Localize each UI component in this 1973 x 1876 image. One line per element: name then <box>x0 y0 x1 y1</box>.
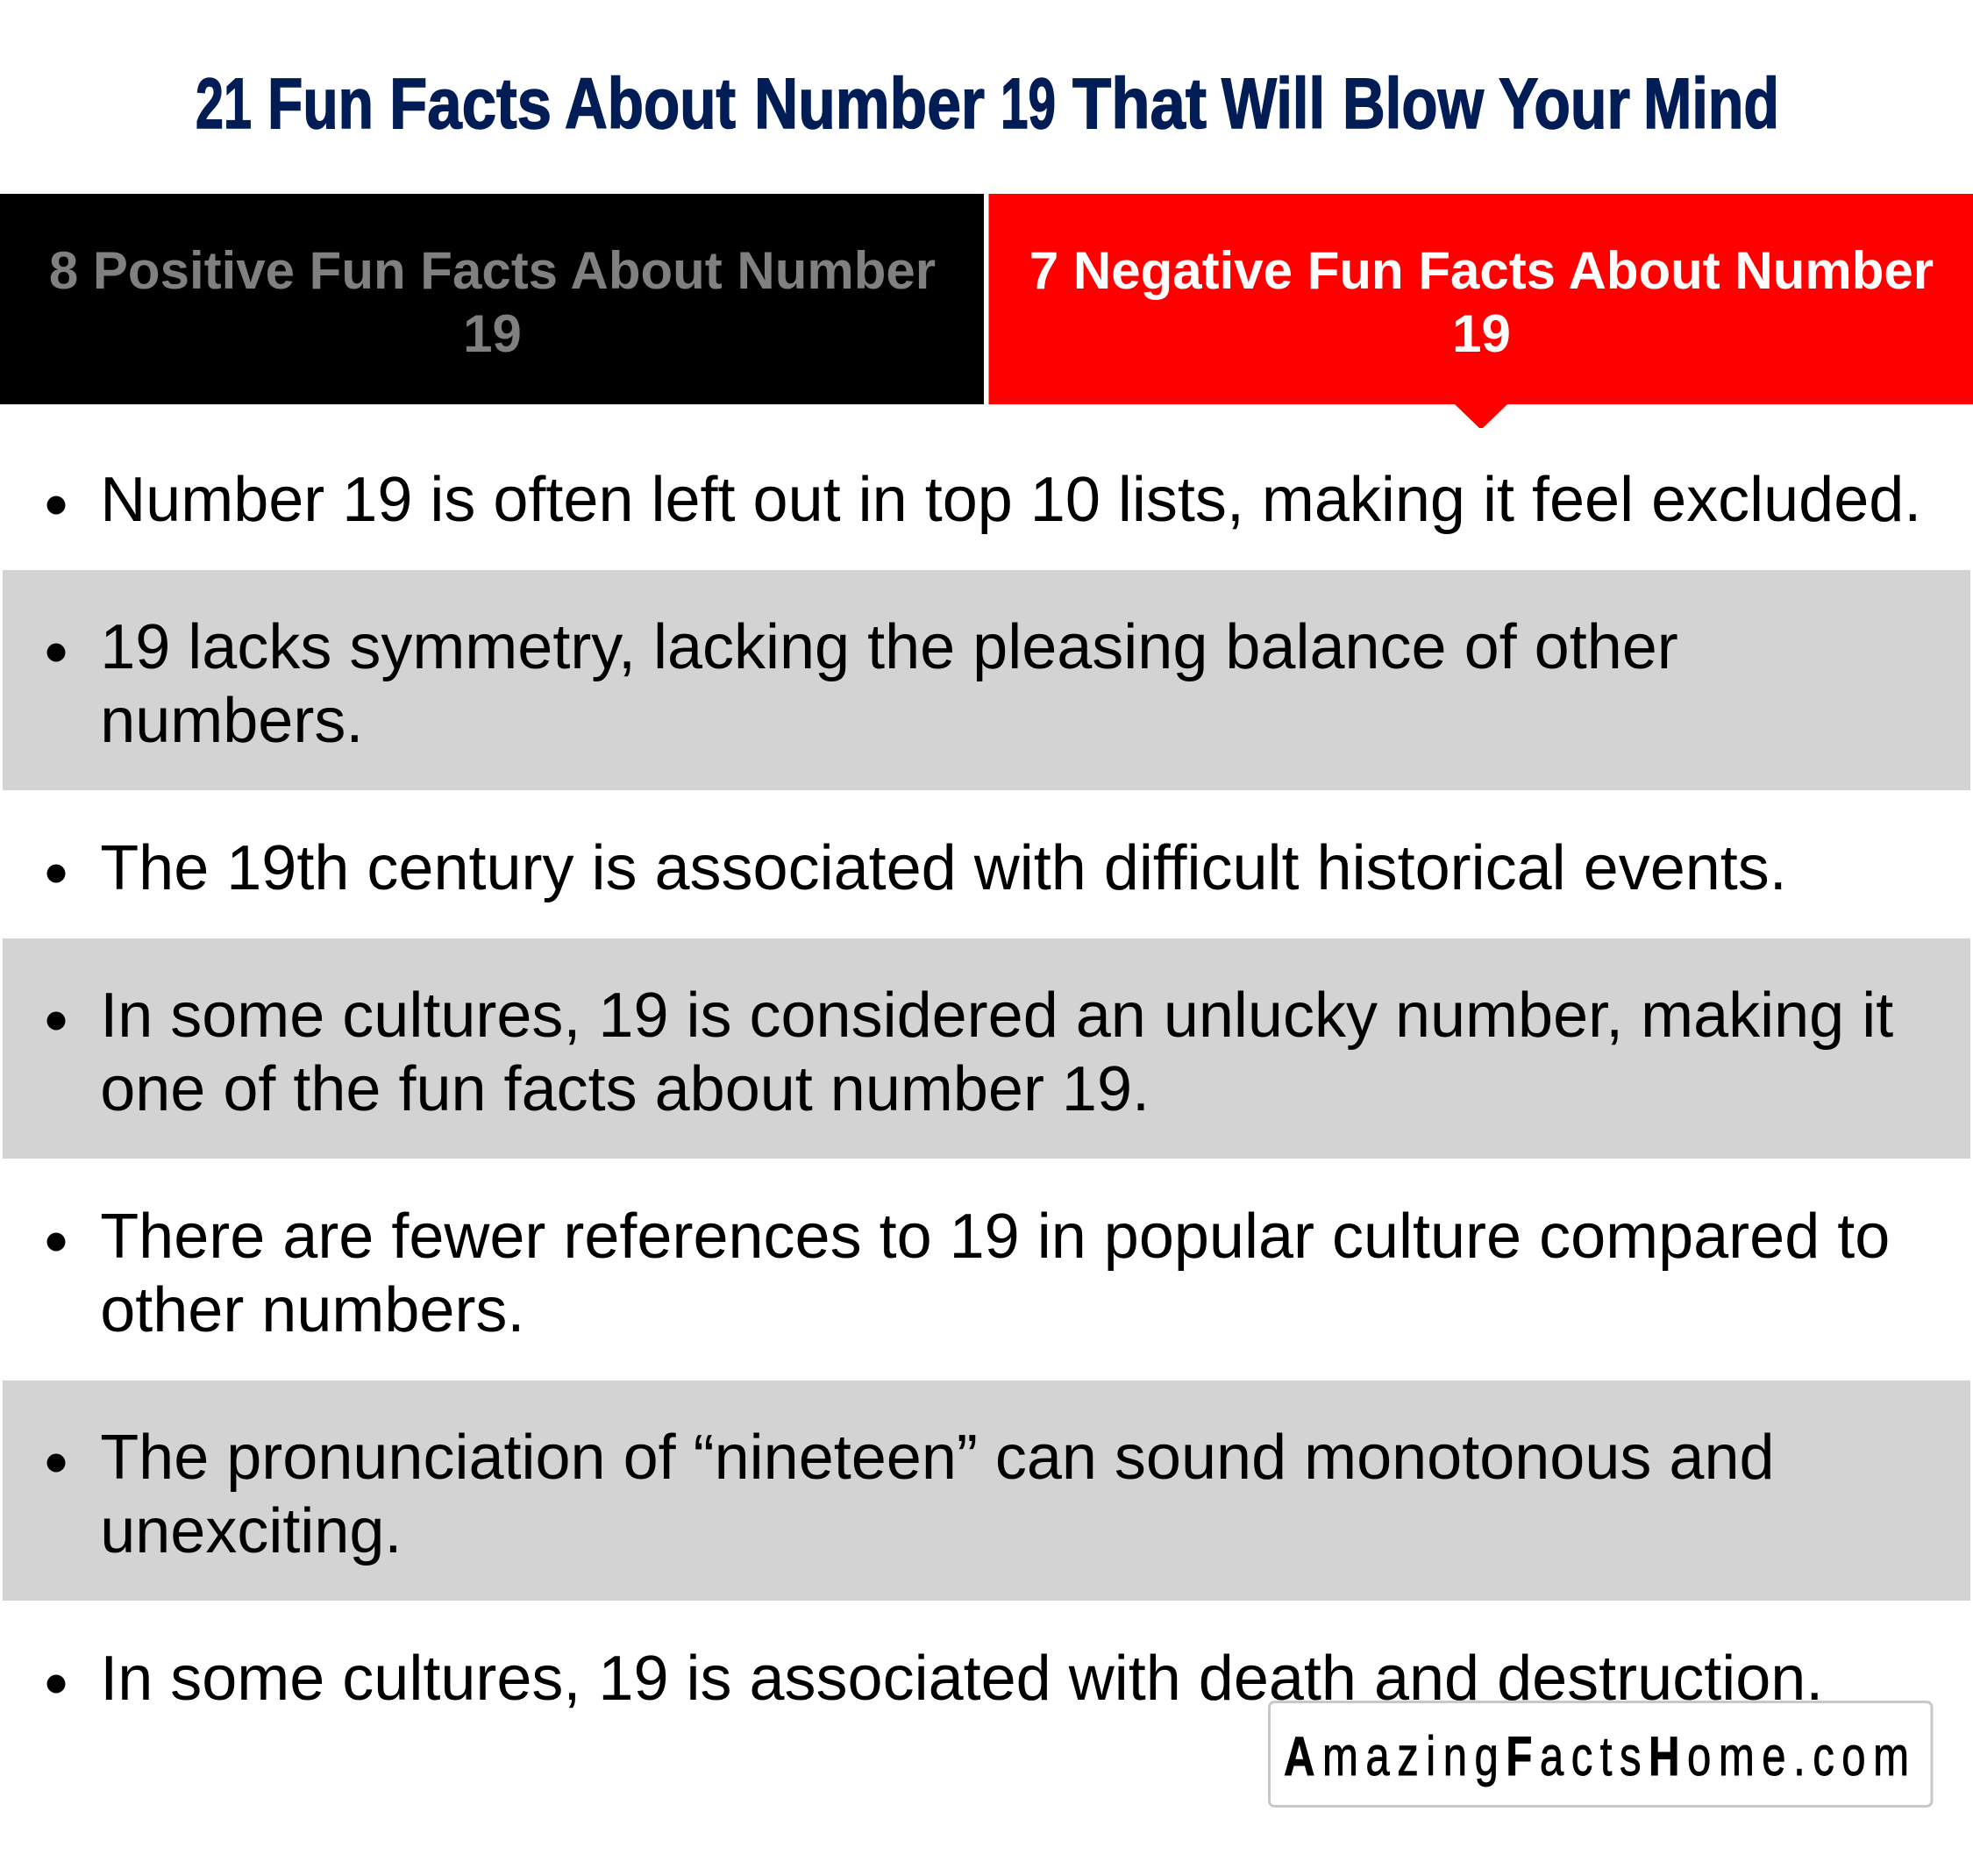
panel: fact 4: one of the fun facts about number 19. <box>100 1054 1150 1124</box>
panel: fact 7: In some cultures, 19 is associated with death and destruction. <box>100 1644 1823 1714</box>
panel: fact 6: The pronunciation of “nineteen” can sound monotonous and <box>100 1423 1775 1493</box>
panel: fact 2: 19 lacks symmetry, lacking the pleasing balance of other <box>100 612 1678 682</box>
panel: fact 1: Number 19 is often left out in top 10 lists, making it feel excluded. <box>100 465 1921 535</box>
panel: positive tab <box>0 194 984 404</box>
panel: fact 5 <box>47 1202 1890 1345</box>
panel: fact 5: There are fewer references to 19 in popular culture compared to <box>100 1202 1890 1272</box>
panel: negative tab <box>989 194 1973 428</box>
title: Number <box>754 64 985 144</box>
title: Your <box>1499 64 1630 144</box>
title: Fun <box>267 64 374 144</box>
title <box>196 64 1779 144</box>
panel: fact 2: numbers. <box>100 686 363 756</box>
title: 19 <box>1001 64 1056 144</box>
title: Facts <box>389 64 552 144</box>
panel: positive tab: 19 <box>463 304 522 363</box>
title: 21 <box>196 64 252 144</box>
panel: fact 4: In some cultures, 19 is considered an unlucky number, making it <box>100 981 1893 1051</box>
watermark: AmazingFactsHome.com <box>1284 1725 1917 1787</box>
panel: fact 2 <box>3 570 1970 790</box>
panel: negative tab: 7 Negative Fun Facts About Number <box>1029 241 1934 300</box>
panel: negative tab: 19 <box>1452 304 1511 363</box>
panel: fact 4 <box>3 938 1970 1159</box>
title: Mind <box>1643 64 1779 144</box>
panel: fact 5: other numbers. <box>100 1275 524 1345</box>
panel: positive tab: 8 Positive Fun Facts About Number <box>49 241 936 300</box>
title: That <box>1072 64 1207 144</box>
title: Will <box>1222 64 1325 144</box>
title: Blow <box>1343 64 1484 144</box>
panel: fact 6 <box>3 1380 1970 1601</box>
watermark <box>1270 1701 1932 1807</box>
panel: fact 6: unexciting. <box>100 1496 402 1566</box>
title: About <box>565 64 736 144</box>
panel: fact 3: The 19th century is associated with difficult historical events. <box>100 833 1787 903</box>
